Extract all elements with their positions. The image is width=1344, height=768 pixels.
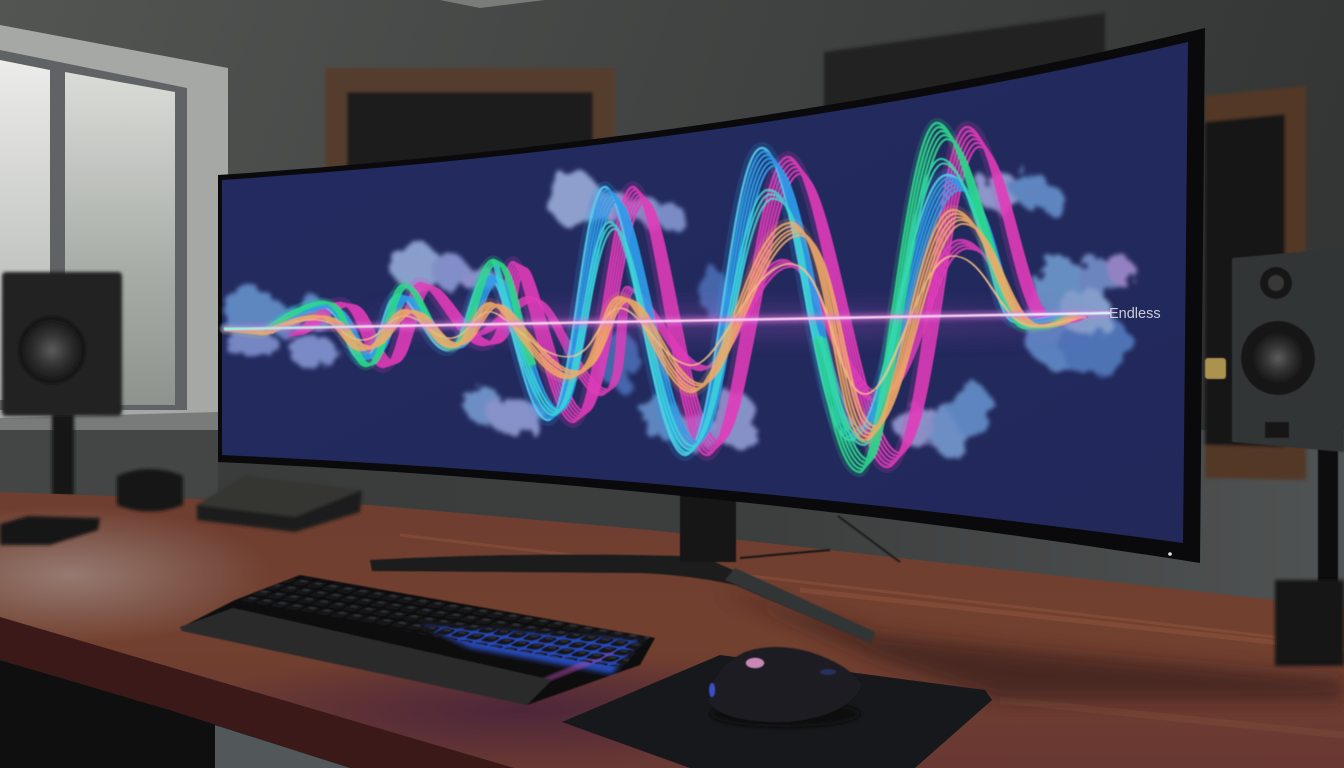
purple sheen xyxy=(190,652,850,768)
cloud bottom right xyxy=(896,382,992,456)
magenta wave xyxy=(290,127,1088,467)
blue wave xyxy=(225,148,1078,455)
pink backlight xyxy=(532,648,618,688)
screen xyxy=(222,42,1188,543)
under desk xyxy=(0,660,350,768)
desk xyxy=(0,492,1344,768)
desk light sheen xyxy=(0,505,270,645)
wrist rest xyxy=(180,608,552,705)
cloud behind wave xyxy=(596,269,730,388)
cloud top right xyxy=(976,170,1064,214)
desk front face xyxy=(0,617,514,768)
keyboard xyxy=(180,575,655,705)
bezel xyxy=(218,28,1205,563)
clouds xyxy=(222,170,1136,456)
ceiling corner xyxy=(440,0,545,8)
window sill xyxy=(0,412,218,432)
teal inner wave xyxy=(493,190,820,453)
cloud bottom left xyxy=(465,385,548,435)
monitor stand xyxy=(370,490,900,643)
right black block xyxy=(1275,580,1344,666)
monitor xyxy=(218,28,1205,563)
desk shadow xyxy=(720,590,1344,700)
label: Endless: Endless xyxy=(1109,306,1161,322)
desk grain xyxy=(400,535,1344,735)
dark wall panel xyxy=(824,13,1105,130)
cloud upper left xyxy=(392,246,498,293)
green wave xyxy=(225,123,1080,472)
mouse pad xyxy=(562,655,992,768)
keycaps xyxy=(236,576,650,668)
under desk floor xyxy=(215,725,350,768)
cloud bottom centre xyxy=(642,392,757,450)
small box xyxy=(117,469,183,512)
blue backlight xyxy=(420,625,640,674)
cloud top centre xyxy=(549,172,687,231)
centre glow xyxy=(360,315,1080,329)
mouse xyxy=(708,647,862,727)
left speaker xyxy=(2,272,122,496)
phone xyxy=(0,516,100,545)
keyboard body xyxy=(180,575,655,705)
audio interface xyxy=(197,476,362,532)
window xyxy=(0,25,228,505)
orange wave xyxy=(225,210,1085,440)
desk items xyxy=(0,469,1344,666)
power led xyxy=(1168,552,1172,556)
right speaker xyxy=(1205,248,1344,585)
picture frame: right xyxy=(1205,86,1306,480)
cloud left xyxy=(222,286,337,368)
picture frame: left xyxy=(325,68,615,178)
inner magenta wave xyxy=(470,240,1038,400)
lower wall xyxy=(210,430,1344,640)
bright centre line xyxy=(225,313,1110,329)
waveforms xyxy=(225,123,1110,472)
cloud end xyxy=(1022,258,1136,377)
